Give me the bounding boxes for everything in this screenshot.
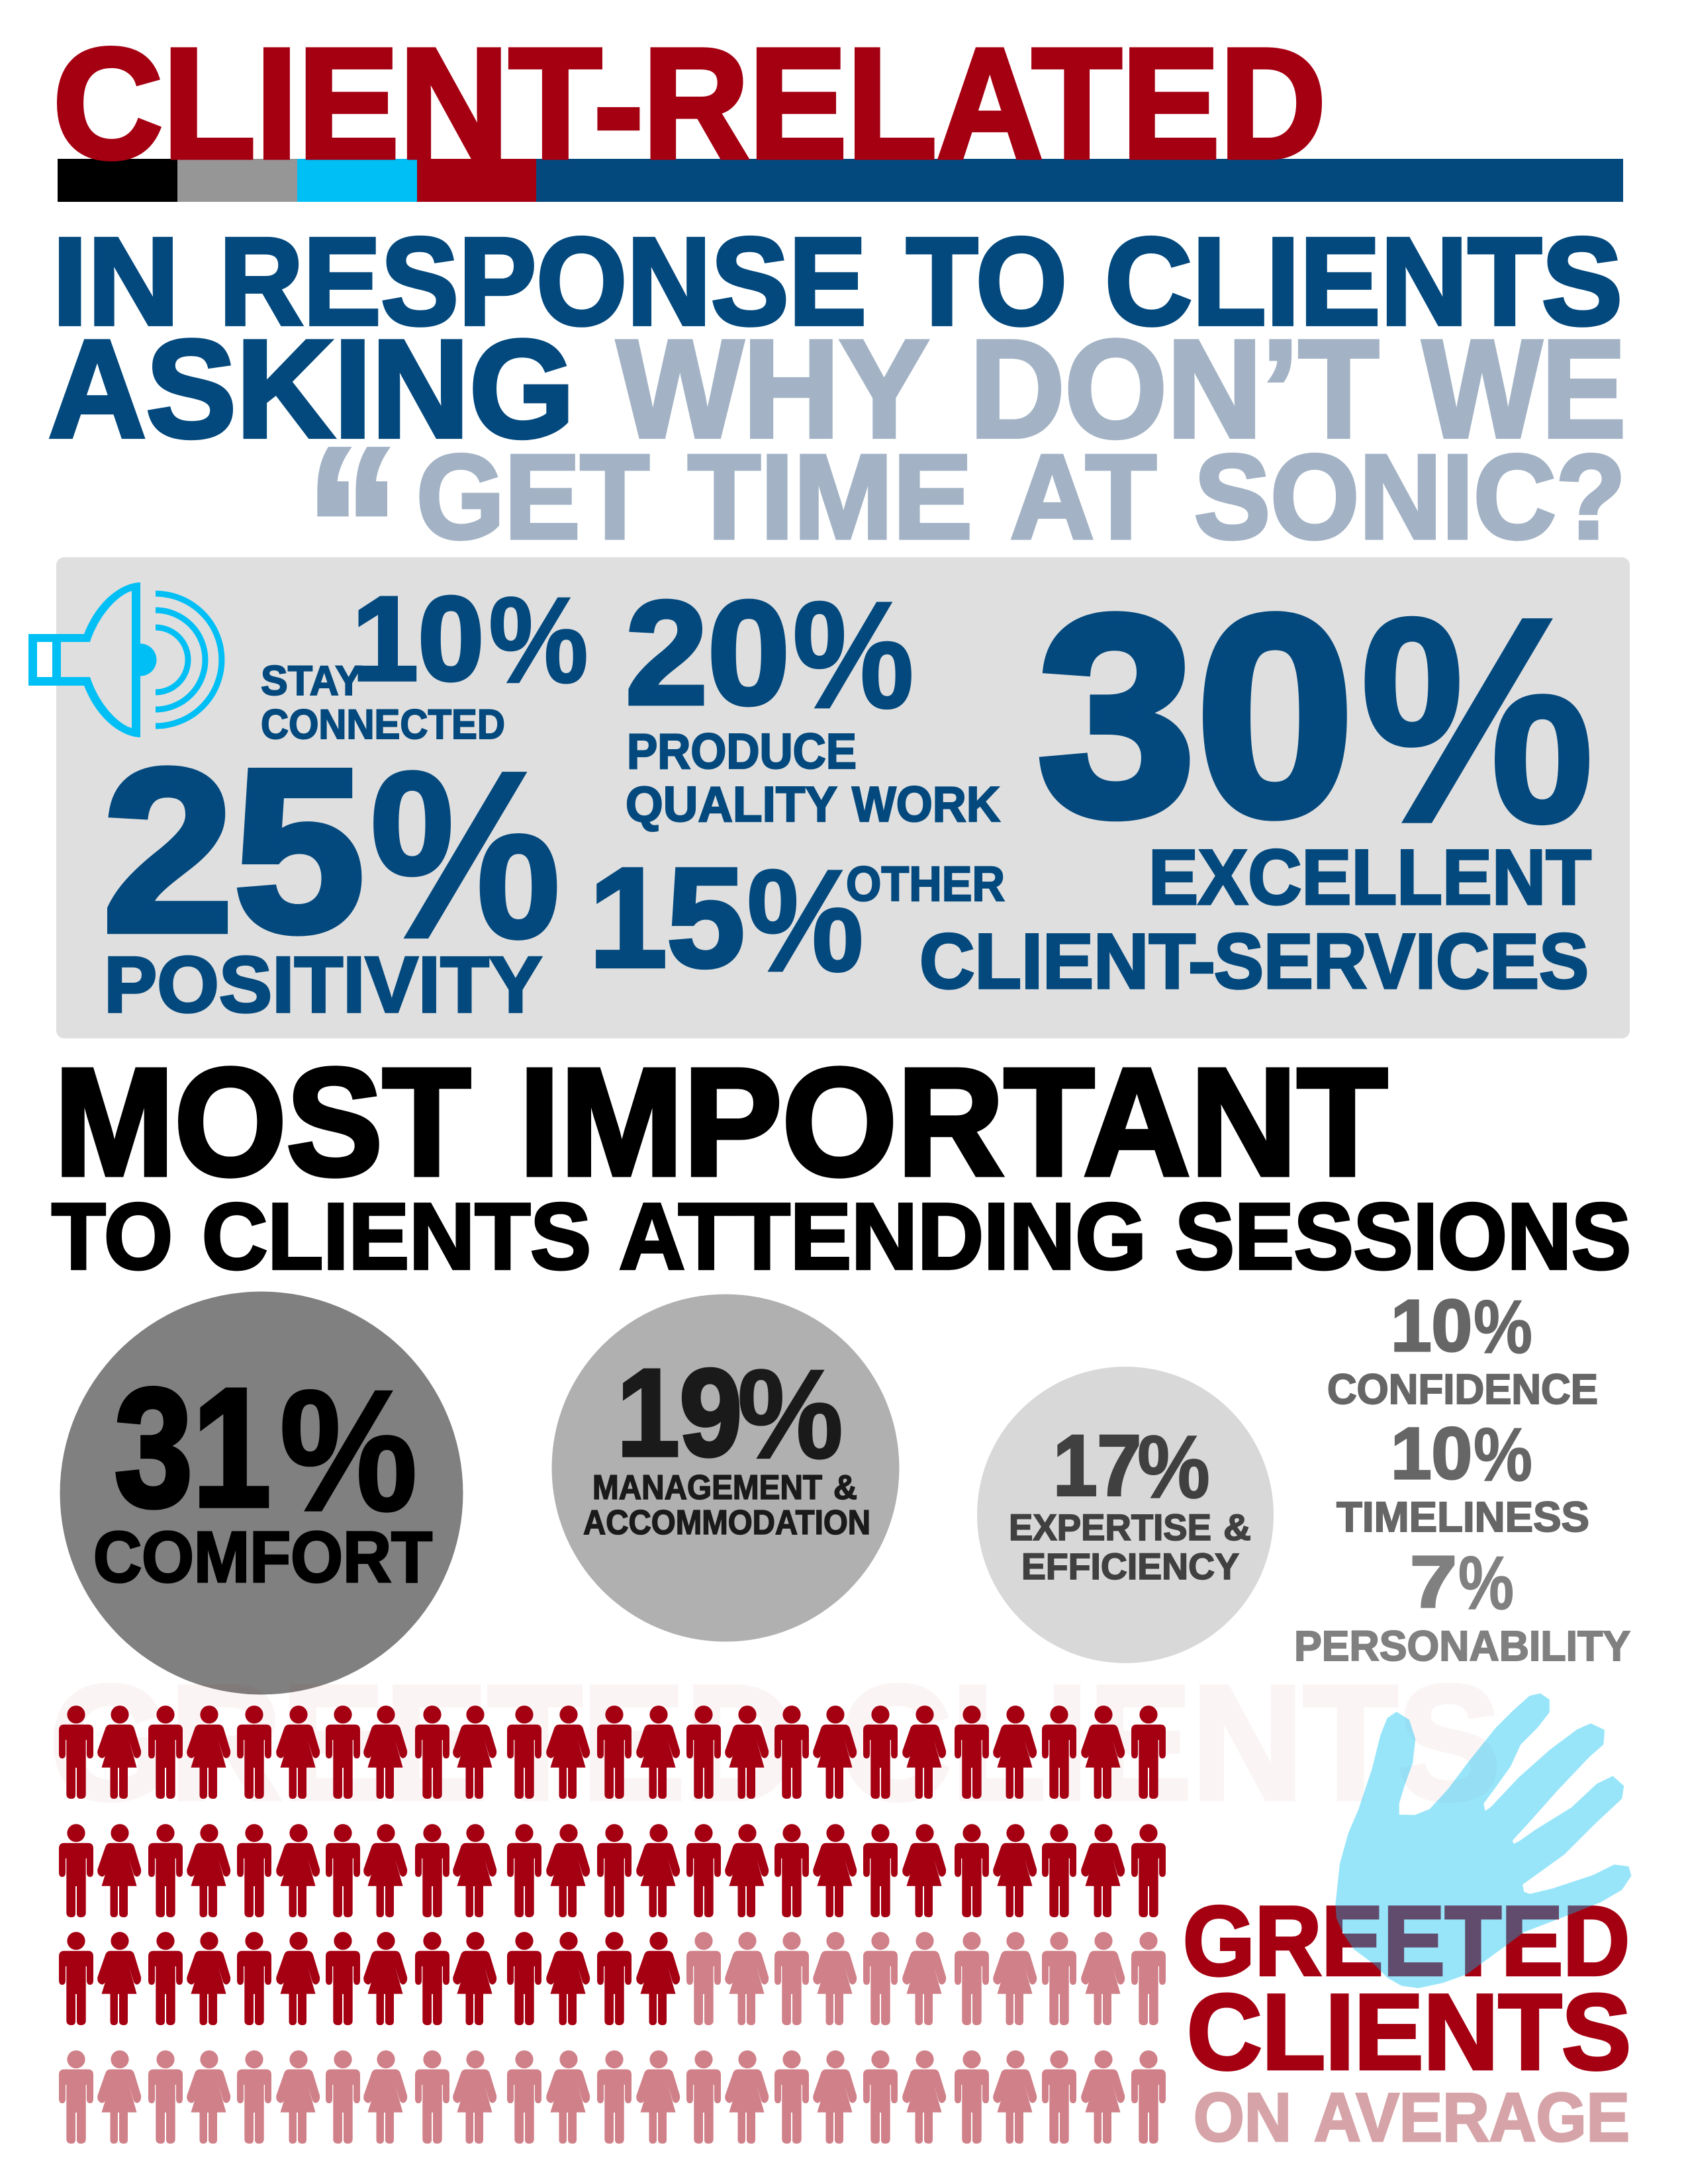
row 1 bbox=[59, 1706, 1166, 1799]
heading line 1: TO bbox=[906, 212, 1067, 351]
stat: 10% timeliness bbox=[1391, 1413, 1532, 1497]
heading: most important: IMPORTANT bbox=[519, 1036, 1387, 1207]
heading line 2 pale: WE bbox=[1423, 311, 1626, 467]
stat: 10% confidence: 10 bbox=[1391, 1285, 1472, 1367]
circle: comfort bbox=[60, 1292, 463, 1694]
heading line 2 pale bbox=[617, 311, 1626, 467]
label: positivity: POSITIVITY bbox=[104, 940, 542, 1029]
stat: 10%: 10 bbox=[352, 572, 484, 705]
circle: management bbox=[552, 1295, 899, 1641]
colour bar bbox=[58, 159, 1623, 202]
stat: 20%: % bbox=[792, 570, 914, 740]
label: on average: AVERAGE bbox=[1314, 2079, 1630, 2156]
title: - bbox=[594, 18, 643, 193]
row 4 bbox=[59, 2050, 1166, 2144]
label: greeted: GREETED bbox=[1183, 1886, 1630, 1996]
label: produce: PRODUCE bbox=[627, 723, 857, 779]
label: confidence: CONFIDENCE bbox=[1327, 1365, 1598, 1413]
label: expertise and: EXPERTISE bbox=[1009, 1506, 1211, 1548]
label: stay: STAY bbox=[261, 658, 362, 704]
heading line 3: SONIC? bbox=[1194, 430, 1626, 564]
stat: 15%: % bbox=[747, 839, 864, 1002]
stat: 31%: % bbox=[279, 1355, 418, 1547]
watermark text: GREETED CLIENTS bbox=[50, 1652, 1501, 1834]
heading: most important: MOST bbox=[54, 1036, 471, 1207]
stat: 7%: 7 bbox=[1410, 1541, 1457, 1623]
stat: 10% timeliness: % bbox=[1474, 1413, 1532, 1497]
subheading: to clients attending sessions: CLIENTS bbox=[202, 1184, 591, 1289]
stat: 31% bbox=[115, 1353, 418, 1547]
stat: 19%: % bbox=[737, 1343, 843, 1485]
label: on average bbox=[1194, 2079, 1630, 2156]
stat: 17%: 17 bbox=[1053, 1417, 1141, 1514]
label: connected: CONNECTED bbox=[261, 702, 505, 748]
label: expertise and: & bbox=[1223, 1506, 1251, 1548]
heading line 3 bbox=[416, 430, 1626, 564]
heading line 3: AT bbox=[1010, 430, 1156, 564]
label: management and: & bbox=[833, 1469, 857, 1507]
quotation mark: “ bbox=[306, 402, 399, 651]
subheading: to clients attending sessions: SESSIONS bbox=[1175, 1184, 1631, 1289]
panel: survey results bbox=[28, 557, 1630, 1038]
label: quality work: WORK bbox=[852, 776, 1000, 832]
stat: 25% bbox=[103, 721, 561, 988]
label: quality work: QUALITY bbox=[626, 776, 837, 832]
heading line 2 navy: ASKING bbox=[48, 311, 575, 467]
column: smaller stats bbox=[1294, 1285, 1630, 1670]
callout: greeted clients bbox=[1183, 1694, 1631, 2156]
label: efficiency: EFFICIENCY bbox=[1021, 1545, 1239, 1587]
heading line 1 bbox=[52, 212, 1622, 351]
label: other: OTHER bbox=[846, 856, 1005, 911]
subheading: to clients attending sessions bbox=[52, 1184, 1631, 1289]
stat: 20%: 20 bbox=[626, 571, 790, 735]
row 3 bbox=[59, 1932, 1166, 2025]
stat: 20% bbox=[626, 570, 914, 740]
label: management and: MANAGEMENT bbox=[592, 1469, 822, 1507]
label: timeliness: TIMELINESS bbox=[1336, 1493, 1589, 1541]
heading line 1: CLIENTS bbox=[1105, 212, 1622, 351]
heading line 3: TIME bbox=[688, 430, 972, 564]
title bbox=[53, 16, 1326, 193]
icon: hand bbox=[1336, 1694, 1630, 1987]
stat: 25%: % bbox=[369, 722, 561, 988]
label: client-services bbox=[919, 918, 1589, 1005]
stat: 7%: % bbox=[1458, 1541, 1514, 1625]
heading line 3: GET bbox=[416, 430, 649, 564]
stat: 19% bbox=[617, 1343, 843, 1485]
heading line 2 pale: DON’T bbox=[970, 311, 1379, 467]
label: on average: ON bbox=[1194, 2079, 1291, 2156]
circle: expertise bbox=[977, 1367, 1274, 1663]
stat: 30%: 30 bbox=[1037, 557, 1354, 875]
stat: 10% timeliness: 10 bbox=[1391, 1413, 1472, 1494]
label: comfort: COMFORT bbox=[93, 1517, 432, 1598]
stat: 7% bbox=[1410, 1541, 1514, 1625]
row 2 bbox=[59, 1824, 1166, 1917]
stat: 30% bbox=[1037, 557, 1595, 884]
stat: 10% confidence bbox=[1391, 1285, 1532, 1369]
label: quality work bbox=[626, 776, 1000, 832]
stat: 19%: 19 bbox=[617, 1343, 742, 1482]
label: personability: PERSONABILITY bbox=[1294, 1622, 1630, 1670]
heading line 1: RESPONSE bbox=[219, 212, 867, 351]
stat: 17%: % bbox=[1137, 1417, 1210, 1517]
stat: 25%: 25 bbox=[103, 721, 365, 980]
label: clients: CLIENTS bbox=[1187, 1972, 1631, 2092]
stat: 10% confidence: % bbox=[1474, 1285, 1532, 1369]
title: CLIENT bbox=[53, 16, 602, 191]
stat: 17% bbox=[1053, 1417, 1210, 1517]
stat: 10% bbox=[352, 572, 588, 709]
stat: 31%: 31 bbox=[115, 1353, 271, 1541]
heading line 1: IN bbox=[52, 212, 179, 351]
subheading: to clients attending sessions: ATTENDING bbox=[619, 1184, 1147, 1289]
stat: 15%: 15 bbox=[589, 839, 745, 997]
label: client-services: - bbox=[1188, 918, 1215, 1005]
icon: speaker bbox=[28, 582, 222, 737]
label: excellent: EXCELLENT bbox=[1149, 834, 1591, 921]
pictogram: people bbox=[59, 1706, 1166, 2144]
label: client-services: SERVICES bbox=[1214, 918, 1589, 1005]
heading: most important bbox=[54, 1036, 1387, 1207]
subheading: to clients attending sessions: TO bbox=[52, 1184, 173, 1289]
label: client-services: CLIENT bbox=[919, 918, 1196, 1005]
heading line 2 pale: WHY bbox=[617, 311, 929, 467]
title: RELATED bbox=[643, 16, 1326, 191]
heading: quote block bbox=[48, 212, 1626, 651]
stat: 15% bbox=[589, 839, 864, 1002]
stat: 30%: % bbox=[1360, 557, 1595, 884]
stat: 10%: % bbox=[489, 572, 588, 709]
label: accommodation: ACCOMMODATION bbox=[583, 1504, 870, 1542]
